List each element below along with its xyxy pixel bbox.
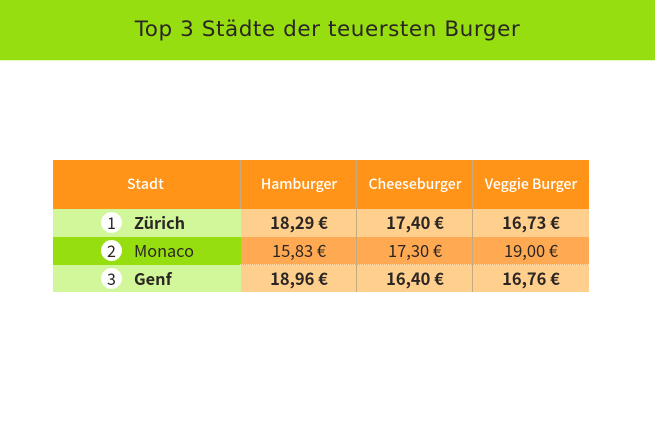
price: 16,73 € xyxy=(502,210,560,234)
price table xyxy=(53,160,589,292)
price: 16,40 € xyxy=(386,266,444,290)
rank badge 3: 3 xyxy=(107,266,116,290)
price: 15,83 € xyxy=(272,238,326,262)
row: Genf xyxy=(53,265,589,292)
column heading: Stadt: Stadt xyxy=(127,174,164,194)
price: 17,30 € xyxy=(388,238,442,262)
rank badge 1: 1 xyxy=(107,210,116,234)
price: 18,96 € xyxy=(270,266,328,290)
city cell: Zürich xyxy=(53,209,241,237)
row: Zürich xyxy=(53,209,589,237)
rank badge 3 xyxy=(101,268,122,289)
title banner xyxy=(0,0,655,61)
city name: Zürich xyxy=(134,210,185,234)
city cell: Monaco xyxy=(53,237,241,265)
column heading: Veggie Burger: Veggie Burger xyxy=(485,174,577,194)
rank badge 1 xyxy=(101,212,122,233)
price: 19,00 € xyxy=(504,238,558,262)
column heading: Cheeseburger: Cheeseburger xyxy=(368,174,462,194)
city cell: Genf xyxy=(53,265,241,292)
column heading: Hamburger: Hamburger xyxy=(261,174,337,194)
rank badge 2 xyxy=(101,240,122,261)
header row xyxy=(53,160,589,209)
city name: Monaco xyxy=(134,238,194,262)
city name: Genf xyxy=(134,266,172,290)
price: 16,76 € xyxy=(502,266,560,290)
price: 17,40 € xyxy=(386,210,444,234)
price: 18,29 € xyxy=(270,210,328,234)
row: Monaco xyxy=(53,237,589,265)
title: Top 3 Städte der teuersten Burger xyxy=(135,17,520,42)
rank badge 2: 2 xyxy=(107,238,116,262)
